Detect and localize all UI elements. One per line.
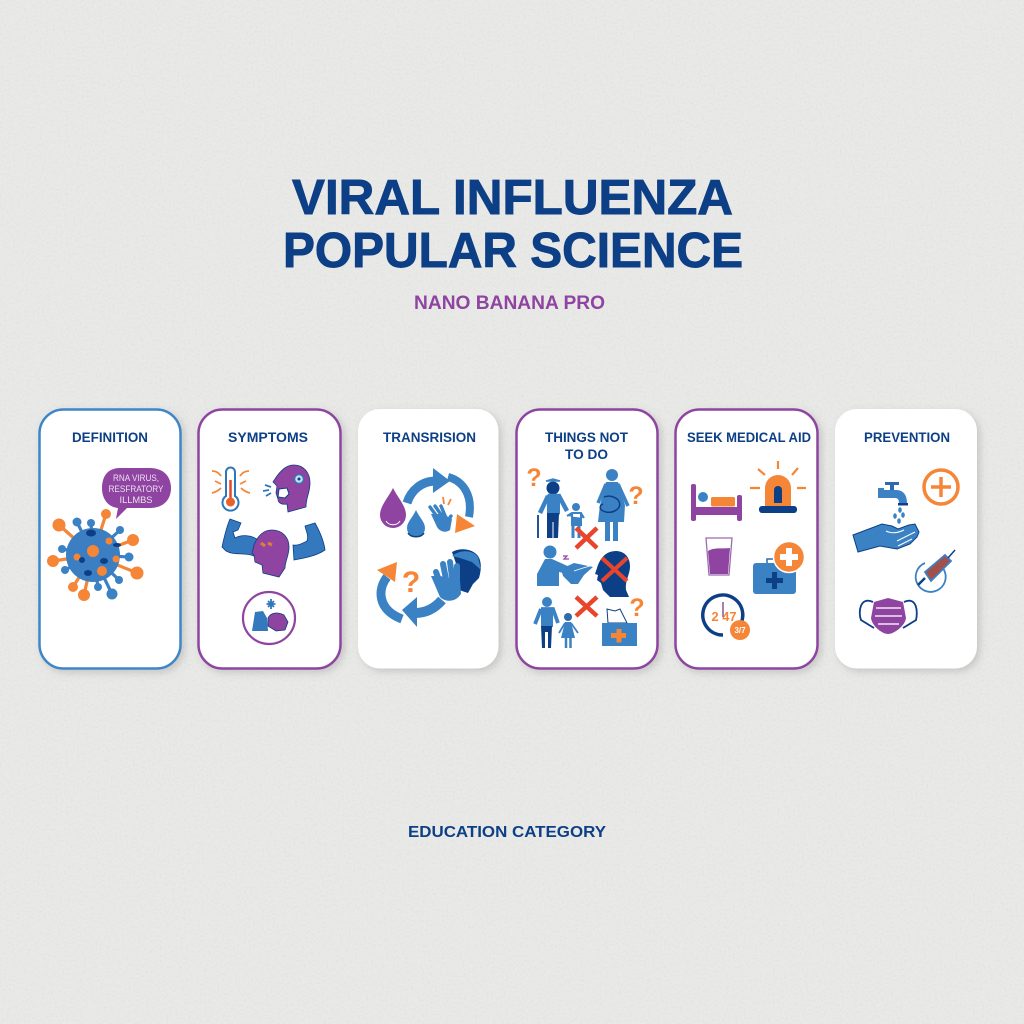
panel: definition: [40, 410, 180, 668]
icon: siren: [750, 461, 806, 513]
icon: hand: [853, 524, 919, 552]
panel: symptoms: [198, 410, 340, 668]
heading: things not to do: [545, 430, 629, 462]
footer label: EDUCATION CATEGORY: [408, 824, 606, 841]
icon: 24/7 clock: [703, 595, 750, 640]
icon: glass of water: [706, 538, 732, 575]
icon: elderly person and child: [538, 479, 584, 538]
heading: prevention: PREVENTION: [864, 430, 950, 445]
icon: 24/7 clock: 3/7: [734, 626, 746, 635]
icon: plus circle: [924, 470, 958, 504]
question marks: ?: [628, 482, 644, 510]
icon: fist in circle: [243, 592, 295, 644]
icon: pregnant person: [598, 469, 628, 541]
icon: adult and girl: [535, 597, 578, 648]
speech bubble: RESFRATORY: [108, 484, 164, 494]
title: POPULAR SCIENCE: [283, 224, 743, 278]
icon: circular arrows bottom with hand and head: [377, 549, 481, 627]
panel: prevention: [835, 409, 977, 668]
speech bubble: [102, 468, 171, 519]
subtitle: NANO BANANA PRO: [414, 293, 605, 314]
icon: coughing head: [263, 465, 310, 512]
heading: things not to do: THINGS NOT: [545, 430, 629, 445]
heading: symptoms: SYMPTOMS: [228, 430, 308, 445]
icon: red x top: [576, 528, 597, 548]
icon: virus: [47, 509, 144, 601]
speech bubble: RNA VIRUS,: [113, 473, 159, 483]
icon: 24/7 clock: 2 47: [712, 609, 736, 624]
panel: things not to do: [516, 410, 658, 668]
title: VIRAL INFLUENZA: [292, 171, 733, 225]
icon: bed: [691, 484, 742, 521]
heading: things not to do: TO DO: [565, 447, 608, 462]
icon: circular arrows top with droplets and hand: [380, 468, 475, 537]
icon: red x bottom: [576, 597, 597, 616]
speech bubble: ILLMBS: [120, 495, 152, 505]
panel: transmission: [358, 409, 498, 668]
icon: tap: [878, 482, 908, 524]
icon: medical kit: [753, 542, 804, 594]
icon: circular arrows bottom with hand and head: ?: [402, 566, 420, 599]
icon: face mask: [860, 598, 917, 634]
heading: definition: DEFINITION: [72, 430, 148, 445]
panel: seek medical aid: [676, 410, 818, 668]
question marks: [526, 464, 645, 622]
title: [283, 171, 743, 278]
heading: transmission: TRANSRISION: [383, 430, 476, 445]
icon: head with red x: [595, 551, 630, 597]
icon: thermometer: [212, 468, 250, 511]
icon: handshake: [537, 546, 593, 586]
heading: seek medical aid: SEEK MEDICAL AID: [687, 430, 811, 445]
question marks: ?: [526, 464, 542, 492]
icon: muscle ache: [222, 519, 325, 577]
icon: syringe: [916, 550, 955, 592]
question marks: ?: [629, 594, 645, 622]
icon: tissue box with cross: [602, 609, 637, 646]
